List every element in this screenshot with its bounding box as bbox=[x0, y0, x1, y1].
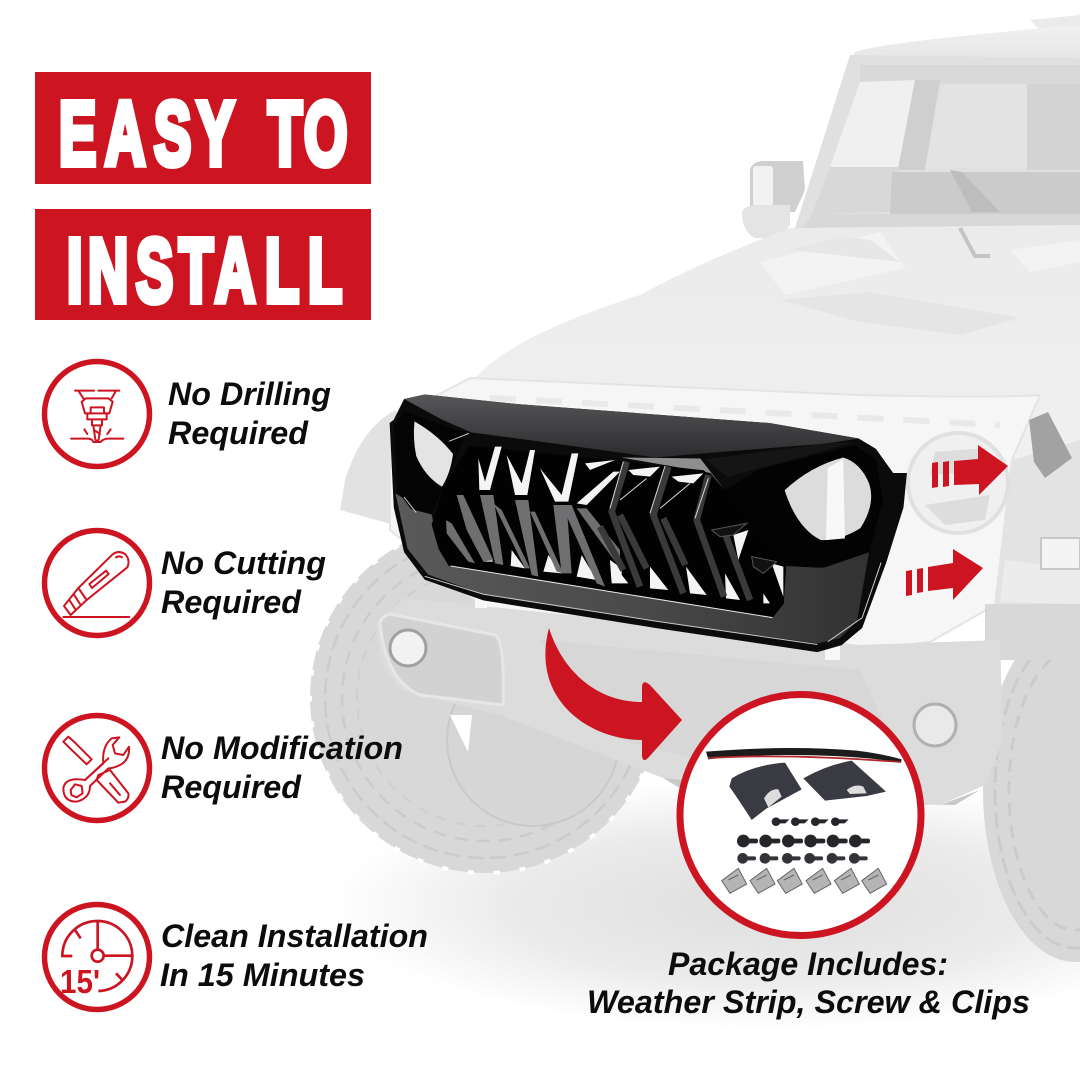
label: No Cutting bbox=[161, 545, 326, 581]
red curved arrow bbox=[545, 628, 682, 760]
fender lamp bbox=[1041, 538, 1080, 569]
lower frame band bbox=[395, 494, 869, 643]
label: Clean Installation bbox=[161, 918, 428, 954]
side mirror bbox=[742, 161, 805, 238]
left tire bbox=[310, 523, 660, 873]
icon: wrench and screwdriver bbox=[44, 716, 150, 820]
label bbox=[161, 730, 403, 805]
icon: 15 minute clock: 15' bbox=[60, 963, 100, 1000]
feature: no modification bbox=[44, 716, 403, 820]
right fender bbox=[985, 440, 1080, 640]
label: No Drilling bbox=[168, 376, 331, 412]
faded jeep background bbox=[310, 15, 1080, 1030]
grille frame bbox=[390, 394, 907, 652]
title banner: install: INSTALL bbox=[67, 220, 342, 321]
push pins bbox=[737, 853, 868, 864]
large clips bbox=[737, 835, 870, 847]
mounting bracket left bbox=[729, 763, 802, 820]
upper lip bbox=[404, 394, 859, 457]
left eye black surround bbox=[394, 411, 466, 514]
label: Required bbox=[168, 415, 309, 451]
bumper bbox=[377, 595, 1003, 805]
label bbox=[160, 918, 428, 993]
right eye black surround bbox=[724, 445, 883, 568]
feature: clean installation bbox=[44, 904, 428, 1010]
grille surround bbox=[390, 378, 1040, 650]
red arrow upper right bbox=[932, 445, 1008, 495]
feature: no drilling bbox=[44, 362, 331, 466]
package caption: Weather Strip, Screw & Clips bbox=[587, 984, 1030, 1020]
label: No Modification bbox=[161, 730, 403, 766]
label: Required bbox=[161, 584, 302, 620]
right eye opening bbox=[785, 457, 871, 540]
headlight bbox=[908, 433, 1008, 533]
red arrow lower right bbox=[906, 549, 983, 600]
left fender and turn signal bbox=[340, 410, 410, 526]
grille opening bbox=[432, 445, 786, 618]
icon: utility knife bbox=[44, 530, 150, 636]
mounting bracket right bbox=[803, 761, 886, 801]
icon: 15 minute clock bbox=[44, 904, 150, 1010]
ground shadow bbox=[330, 780, 1080, 1030]
title banner: easy to: EASY TO bbox=[59, 83, 347, 184]
grille product bbox=[390, 394, 907, 652]
fog lights bbox=[390, 630, 956, 746]
label bbox=[161, 545, 326, 620]
right tire bbox=[983, 618, 1080, 962]
label: In 15 Minutes bbox=[160, 957, 365, 993]
metal clips bbox=[722, 868, 887, 893]
small screws bbox=[772, 817, 849, 826]
hood hinge bbox=[1029, 412, 1072, 478]
teeth right half bbox=[600, 462, 783, 603]
fog housing left bbox=[380, 614, 503, 705]
roof and windshield bbox=[795, 15, 1080, 240]
hood bbox=[470, 225, 1080, 470]
teeth left half bbox=[446, 447, 622, 587]
opening rim highlight bbox=[451, 566, 773, 618]
feature: no cutting bbox=[44, 530, 326, 636]
weather strip bbox=[706, 748, 902, 763]
lip side facet bbox=[705, 442, 855, 477]
label: Required bbox=[161, 769, 302, 805]
left eye opening bbox=[414, 421, 453, 487]
package caption: Package Includes: bbox=[668, 946, 948, 982]
package kit circle bbox=[680, 694, 921, 936]
icon: drill bbox=[44, 362, 150, 466]
label bbox=[168, 376, 331, 451]
chin highlight bbox=[621, 457, 726, 492]
hood shading bbox=[760, 228, 1080, 335]
package caption bbox=[587, 946, 1030, 1020]
frame glare bbox=[404, 433, 881, 644]
